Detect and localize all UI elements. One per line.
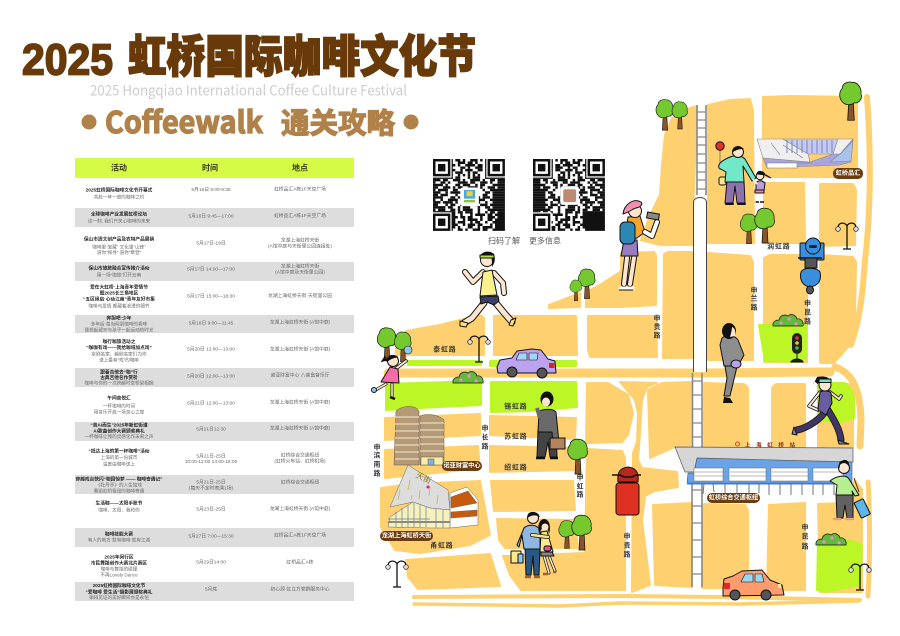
road labels: 路 bbox=[482, 442, 489, 450]
row: Baoshan tourism: (A馆中庭及天街里公园) bbox=[275, 268, 325, 276]
road labels: 兰 bbox=[751, 294, 758, 302]
QR caption: 扫码了解 bbox=[488, 236, 520, 246]
road labels: 锡虹路 bbox=[504, 402, 528, 410]
row: Baoshan products: 龙湖上海虹桥天街 bbox=[281, 236, 319, 244]
character: walking woman in suit bbox=[720, 323, 744, 403]
row: first cup in Shanghai: 温度由咖啡送上 bbox=[103, 460, 135, 468]
english subtitle: 2025 Hongqiao International Coffee Culture Festival bbox=[90, 80, 407, 100]
row: Baoshan products bbox=[84, 236, 332, 256]
row: Baoshan tourism bbox=[89, 262, 325, 278]
row: noon music: 午间音悦汇 bbox=[107, 394, 131, 402]
row: opera flash mob: (每天不定时表演1场) bbox=[189, 484, 234, 492]
row: skills contest: 5月27日 7:00—15:30 bbox=[188, 534, 234, 540]
row: opera flash mob: 5月21日-25日 bbox=[196, 480, 226, 486]
road labels: 滨 bbox=[374, 450, 381, 460]
row: opening ceremony: 5月16日 9:00-9:35 bbox=[191, 187, 231, 193]
row: AI song awards: 5月21日12:30 bbox=[196, 426, 226, 432]
character: man on phone with briefcase bbox=[536, 392, 565, 458]
label: Longfor Hongqiao bbox=[380, 531, 433, 541]
subheading: Coffeewalk guide bbox=[82, 98, 418, 142]
row: skills contest: 有人的地方 就有咖啡 就有江湖 bbox=[88, 536, 151, 544]
row: AI song awards: 龙湖上海虹桥天街 (A馆中庭) bbox=[270, 424, 331, 432]
table header: 地点 bbox=[292, 162, 308, 172]
red suitcase bbox=[612, 467, 641, 515]
row: coffee opera: 京剧名家、越剧名家们为你 bbox=[91, 350, 147, 358]
row: opera flash mob: 《牡丹亭》的人生如戏 bbox=[96, 482, 142, 488]
title: 2025 bbox=[22, 35, 113, 84]
road labels: 申 bbox=[482, 424, 489, 432]
row: first cup in Shanghai: 5月21日-25日 bbox=[196, 454, 226, 460]
panel: event schedule table bbox=[75, 158, 354, 601]
road labels: 申 bbox=[751, 286, 758, 294]
row: photo awards bbox=[86, 582, 330, 601]
row: opera flash mob: 虹桥综合交通枢纽 bbox=[281, 478, 319, 486]
QR code right bbox=[532, 158, 606, 232]
label: Longfor Hongqiao: 龙湖上海虹桥天街 bbox=[382, 532, 431, 540]
label: Noah Wealth Center bbox=[442, 461, 482, 471]
row: first cup in Shanghai: 虹桥综合交通枢纽 bbox=[281, 452, 319, 458]
character: runner man bbox=[460, 252, 516, 327]
row: youth love festival: 爱在大虹桥·上海青年爱情节 bbox=[90, 284, 148, 290]
row: first cup in Shanghai bbox=[89, 448, 326, 468]
road labels: 贵 bbox=[654, 322, 661, 331]
row: noon music: 用音乐开启一场身心之旅 bbox=[94, 408, 145, 416]
character: blue motorcycle courier bbox=[798, 238, 824, 294]
row: dance contest: 咖啡与舞蹈的碰撞 bbox=[101, 566, 138, 572]
row: coffee opera: 龙湖上海虹桥天街 (A馆中庭) bbox=[270, 346, 331, 352]
character: couple bbox=[511, 512, 556, 577]
table header bbox=[75, 158, 354, 178]
road labels: 申 bbox=[654, 314, 661, 322]
character: parent and child bbox=[716, 142, 771, 204]
row: AI song awards: AI歌曲创作大赛颁奖典礼 bbox=[93, 428, 145, 434]
row: dance contest: 虹桥品汇A栋 bbox=[286, 558, 314, 566]
building: Hongqiao transport hub bbox=[675, 447, 853, 495]
road labels: 绍虹路 bbox=[504, 462, 528, 472]
row: first cup in Shanghai: (虹桥火车站、虹桥机场) bbox=[274, 458, 326, 464]
row: run youth: 多年后 每当闻到咖啡的香味 bbox=[91, 320, 148, 328]
row: opening ceremony bbox=[86, 186, 326, 200]
row: coffee opera: 5月20日 12:00—13:00 bbox=[187, 346, 235, 352]
road labels: 路 bbox=[751, 302, 758, 312]
row: dance contest bbox=[91, 554, 314, 578]
road labels: 长 bbox=[482, 432, 489, 442]
row: forum: 5月16日 9:45—17:00 bbox=[188, 214, 234, 220]
row: dance contest: 2025年闵行区 bbox=[104, 554, 134, 560]
subheading: Coffeewalk guide: Coffeewalk bbox=[105, 98, 263, 142]
row: forum bbox=[88, 210, 326, 224]
road labels: 申 bbox=[374, 442, 381, 452]
row: skills contest: 咖啡技能大赛 bbox=[105, 530, 133, 538]
vehicle: purple car bbox=[497, 349, 556, 378]
row: Baoshan products: 5月17日-19日 bbox=[196, 240, 226, 246]
row: guitar: 5月20日 12:00—13:00 bbox=[187, 374, 235, 380]
row: opera flash mob: 邂逅虹桥枢纽的咖啡奇遇 bbox=[94, 488, 145, 494]
road labels bbox=[374, 242, 811, 558]
road labels: 泰虹路 bbox=[433, 344, 457, 354]
row: guitar: 咖啡与你的一次跨越时空桥梁相拥 bbox=[85, 380, 154, 386]
label: Shanghai Hongqiao Station: 上海虹桥站 bbox=[745, 441, 795, 449]
row: AI song awards: 一杯咖啡让我的灵感化作未来之声 bbox=[85, 433, 154, 440]
row: dance contest: 市民舞蹈创作大赛北片赛区 bbox=[91, 560, 147, 566]
building: Longfor Hongqiao Paradise Walk bbox=[388, 465, 478, 528]
road labels: 路 bbox=[374, 468, 381, 478]
building: Longfor Hongqiao Paradise Walk: 天街 bbox=[414, 470, 433, 485]
road labels: 申 bbox=[804, 298, 811, 308]
railway line bbox=[692, 105, 706, 587]
row: opera flash mob bbox=[76, 476, 319, 494]
row: dance contest: 不再Lonely Dance bbox=[100, 572, 138, 578]
label: Hub bbox=[707, 493, 760, 503]
row: youth love festival: 咖啡与爱情 都藏着浪漫的细节 bbox=[88, 302, 150, 310]
row: AI song awards bbox=[85, 422, 331, 440]
row: noon music: 一杯咖啡的时间 bbox=[103, 402, 135, 410]
row: AI song awards: “音AI而生”2025年新虹街道 bbox=[90, 422, 148, 428]
road labels: 申 bbox=[577, 472, 584, 482]
row: youth love festival: “五区缘启·心动江南”青年友好市集 bbox=[83, 296, 155, 302]
street lamps bbox=[386, 223, 871, 590]
row: forum: 这一刻, 我们只关心咖啡的未来 bbox=[88, 218, 151, 224]
road labels: 路 bbox=[577, 490, 584, 498]
character: girl with ball bbox=[372, 346, 412, 399]
row: opening ceremony: 共赴一年一度的咖啡之约 bbox=[94, 194, 145, 200]
row: Baoshan tourism: 保山市旅旅融合宣传推介活动 bbox=[89, 264, 150, 272]
row: dance contest: 5月29日14:00 bbox=[196, 560, 226, 566]
row: run youth: 便想起那天与孩子一起运动的时光 bbox=[85, 326, 154, 334]
title: 虹桥国际咖啡文化节 bbox=[128, 31, 476, 82]
row: Baoshan tourism: 5月17日 14:00—17:00 bbox=[187, 266, 235, 272]
row: coffee opera: 送上最有“戏”的咖啡 bbox=[99, 356, 139, 364]
row: sun journal: 生活咖——太阳手账节 bbox=[96, 500, 143, 506]
row: sun journal: 龙湖上海虹桥天街 (A馆中庭) bbox=[270, 505, 331, 512]
row: photo awards: “爱咖啡 爱生活”摄影展颁奖典礼 bbox=[86, 588, 153, 596]
building: Noah Wealth Center bbox=[394, 406, 444, 465]
row: first cup in Shanghai: 上海的第一份城市 bbox=[101, 454, 138, 461]
row: guitar: 古典吉他名作赏析 bbox=[100, 374, 138, 381]
bushes bbox=[453, 315, 846, 545]
row: opening ceremony: 2025虹桥国际咖啡文化节开幕式 bbox=[86, 186, 153, 194]
table header: 活动 bbox=[111, 162, 127, 172]
road labels: 润虹路 bbox=[767, 242, 791, 250]
row: coffee opera bbox=[86, 338, 331, 364]
row: guitar bbox=[85, 368, 330, 386]
row: run youth: 龙湖上海虹桥天街 (A馆中庭) bbox=[270, 318, 331, 326]
row: sun journal: 咖啡、太阳、我和你 bbox=[98, 506, 140, 514]
row: guitar: 诺亚财富中心 八音盒音乐厅 bbox=[271, 372, 330, 378]
row: coffee opera: 咖行咖旅活动之 bbox=[103, 338, 136, 345]
row: Baoshan products: 咖啡里“宝藏” 文化里“山锋” bbox=[92, 244, 146, 250]
road labels: 路 bbox=[654, 330, 661, 340]
row: noon music: 龙湖上海虹桥天街 (A馆中庭) bbox=[270, 398, 331, 406]
label: Noah Wealth Center: 诺亚财富中心 bbox=[443, 462, 481, 470]
row: run youth bbox=[85, 314, 331, 334]
row: first cup in Shanghai: “抵达上海的第一杯咖啡”活动 bbox=[89, 448, 150, 454]
row: forum: 全球咖啡产业发展虹桥论坛 bbox=[91, 210, 147, 218]
character: girl with backpack and phone bbox=[619, 201, 659, 290]
road labels: 路 bbox=[804, 316, 811, 326]
row: forum: 虹桥品汇A栋1F天空广场 bbox=[274, 212, 326, 219]
row: noon music: 5月21日 12:00—13:00 bbox=[187, 400, 235, 406]
traffic light bbox=[791, 333, 803, 362]
row: noon music bbox=[94, 394, 331, 416]
row: Baoshan products: 道你“探寻” 道你“攀登” bbox=[97, 249, 142, 256]
road labels: 虹 bbox=[577, 482, 584, 490]
label: Shanghai Hongqiao Station bbox=[736, 441, 795, 449]
road labels: 甬虹路 bbox=[430, 540, 454, 550]
road labels: 路 bbox=[802, 542, 809, 550]
row: youth love festival bbox=[83, 284, 332, 310]
row: Baoshan tourism: 龙湖上海虹桥天街 bbox=[281, 262, 319, 270]
building: Hongqiao Pinhui bbox=[757, 139, 853, 168]
row: youth love festival: 暨2025长三角地区 bbox=[100, 290, 139, 296]
row: coffee opera: “咖咖有戏——我给咖啡加点戏” bbox=[86, 344, 152, 351]
QR caption bbox=[488, 236, 561, 246]
row: Baoshan products: (A馆中庭与天街里公园连接处) bbox=[268, 242, 332, 250]
row: photo awards: 2025虹桥国际咖啡文化节 bbox=[93, 582, 146, 589]
row: run youth: 5月18日 9:00—11:45 bbox=[189, 320, 234, 326]
road labels: 申 bbox=[802, 522, 809, 532]
row: opera flash mob: 穿越戏台快闪“咖园惊梦 —— 咖啡奇遇记” bbox=[76, 476, 162, 482]
row: photo awards: 5月底 bbox=[205, 586, 217, 592]
row: guitar: 跟着吉他去“咖”行 bbox=[100, 368, 138, 376]
row: youth love festival: 龙湖上海虹桥天街·天街里公园 bbox=[268, 292, 332, 299]
label: Hongqiao Pinhui bbox=[833, 168, 863, 179]
road labels: 昆 bbox=[802, 532, 809, 540]
row: youth love festival: 5月17日 15:00—18:30 bbox=[187, 294, 235, 300]
row: Baoshan products: 保山市透文创产品及农特产品展销 bbox=[84, 236, 154, 242]
row: run youth: 奔跑吧·少年 bbox=[106, 314, 132, 322]
QR caption: 更多信息 bbox=[529, 236, 561, 246]
table header: 时间 bbox=[202, 162, 218, 172]
trees bbox=[377, 82, 861, 550]
road labels: 南 bbox=[374, 460, 381, 468]
subheading: Coffeewalk guide: 通关攻略 bbox=[281, 101, 395, 142]
row: skills contest: 虹桥品汇A栋1F天空广场 bbox=[274, 532, 326, 538]
label: Hub: 虹桥综合交通枢纽 bbox=[709, 494, 758, 502]
row: photo awards: 初心源·虹立方党群服务中心 bbox=[270, 586, 330, 592]
QR code left bbox=[432, 158, 506, 232]
road labels: 申 bbox=[624, 532, 631, 540]
row: first cup in Shanghai: 10:00-12:00 14:00-16:00 bbox=[185, 459, 238, 465]
road labels: 苏虹路 bbox=[504, 432, 528, 440]
row: opening ceremony: 虹桥品汇A栋1F天空广场 bbox=[274, 186, 326, 192]
row: photo awards: 咖啡见证的美好瞬间亦是永恒 bbox=[89, 594, 149, 601]
row: Baoshan tourism: 用一场“咖旅”打开云南 bbox=[97, 272, 142, 278]
row: skills contest bbox=[88, 530, 326, 544]
character: traveler with suitcase bbox=[830, 460, 870, 519]
map: streets and blocks bbox=[381, 96, 870, 606]
road labels: 贵 bbox=[624, 540, 631, 550]
vehicle: orange car bbox=[723, 570, 784, 600]
label: Hongqiao Pinhui: 虹桥品汇 bbox=[836, 169, 860, 177]
character: jogger bbox=[792, 376, 849, 444]
road labels: 昆 bbox=[804, 308, 811, 316]
road labels: 路 bbox=[624, 550, 631, 558]
row: sun journal bbox=[96, 500, 331, 514]
row: sun journal: 5月23日-25日 bbox=[196, 506, 226, 512]
